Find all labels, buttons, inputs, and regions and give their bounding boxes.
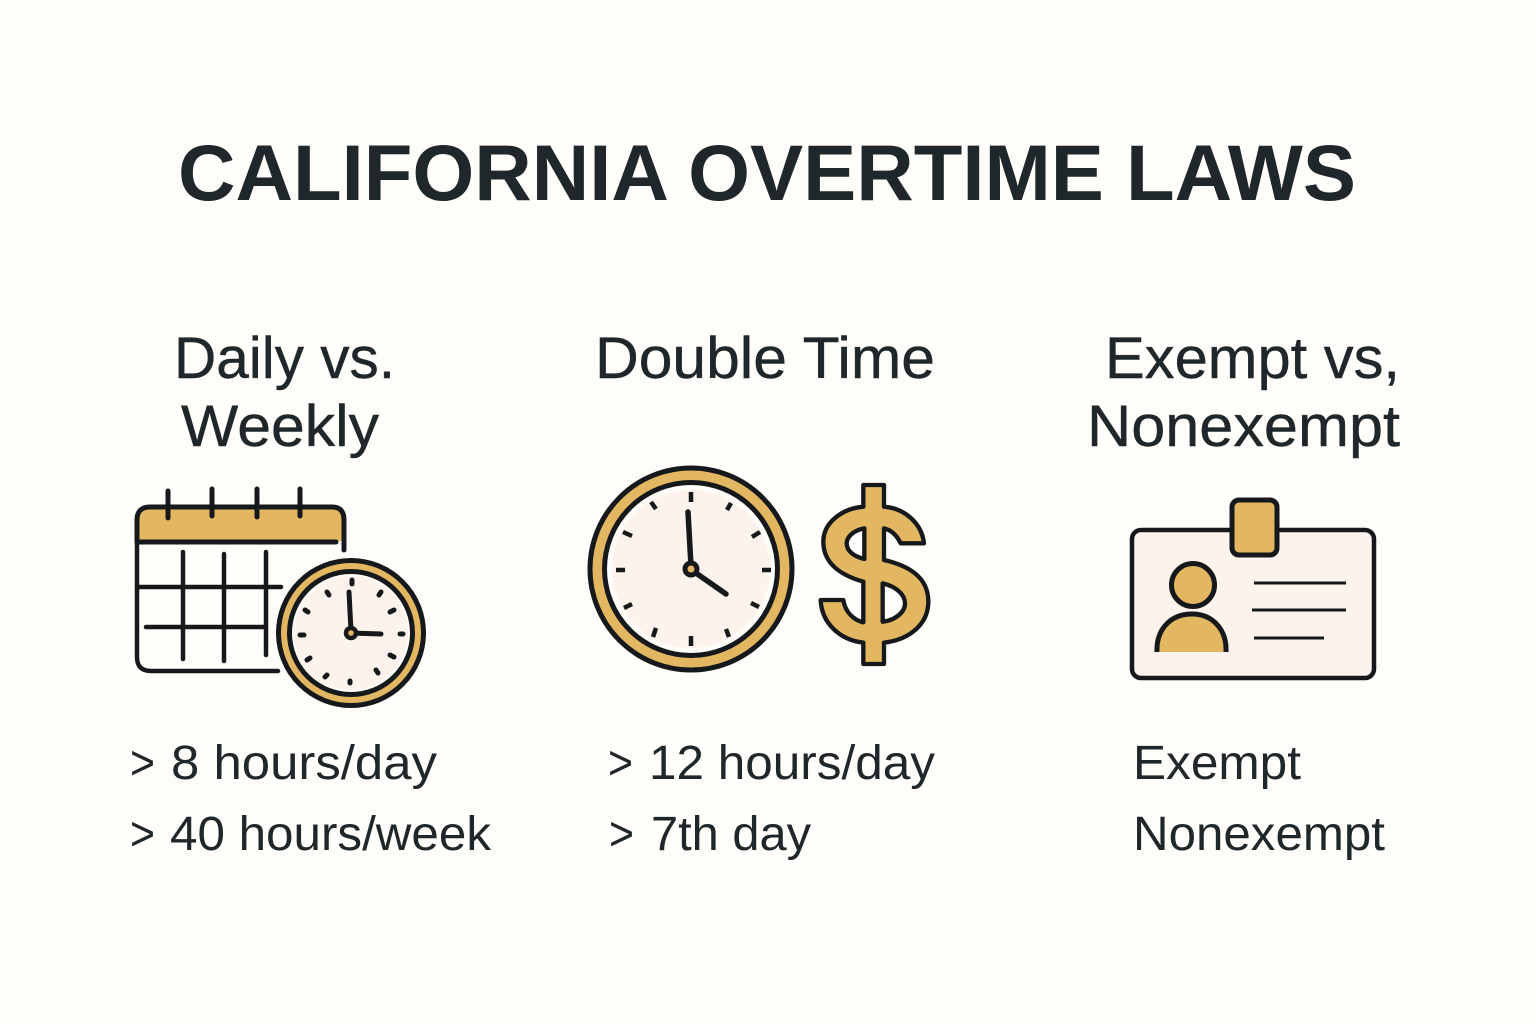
icon: dollar sign — [821, 485, 928, 664]
heading: double time: Double Time — [595, 326, 935, 391]
heading: daily vs weekly: Weekly — [181, 394, 379, 459]
text: exempt categories: Nonexempt — [1133, 808, 1385, 861]
heading: daily vs weekly — [174, 326, 395, 459]
column 1: daily vs weekly — [130, 326, 492, 861]
text: double time thresholds: > — [608, 737, 633, 790]
text: thresholds: 8 hours/day — [171, 737, 437, 790]
icon: id badge — [1132, 500, 1374, 678]
text: double time thresholds: 12 hours/day — [649, 737, 935, 790]
text: double time thresholds: 7th day — [651, 808, 811, 861]
text: thresholds: 40 hours/week — [170, 808, 492, 861]
text: double time thresholds: > — [609, 808, 634, 861]
text: thresholds: > — [130, 808, 155, 861]
column 3: exempt vs nonexempt — [1087, 326, 1400, 861]
text: thresholds: > — [130, 737, 155, 790]
heading: exempt vs nonexempt: Exempt vs, — [1105, 326, 1400, 391]
column 2: double time — [590, 326, 935, 861]
icon: calendar with clock — [137, 489, 424, 706]
heading: daily vs weekly: Daily vs. — [174, 326, 395, 391]
text: exempt categories: Exempt — [1133, 737, 1301, 790]
title: CALIFORNIA OVERTIME LAWS — [178, 128, 1356, 217]
heading: exempt vs nonexempt: Nonexempt — [1087, 394, 1400, 459]
text: double time thresholds — [608, 737, 935, 861]
text: thresholds — [130, 737, 492, 861]
heading: exempt vs nonexempt — [1087, 326, 1400, 459]
text: exempt categories — [1133, 737, 1385, 861]
icon: clock — [590, 468, 792, 670]
